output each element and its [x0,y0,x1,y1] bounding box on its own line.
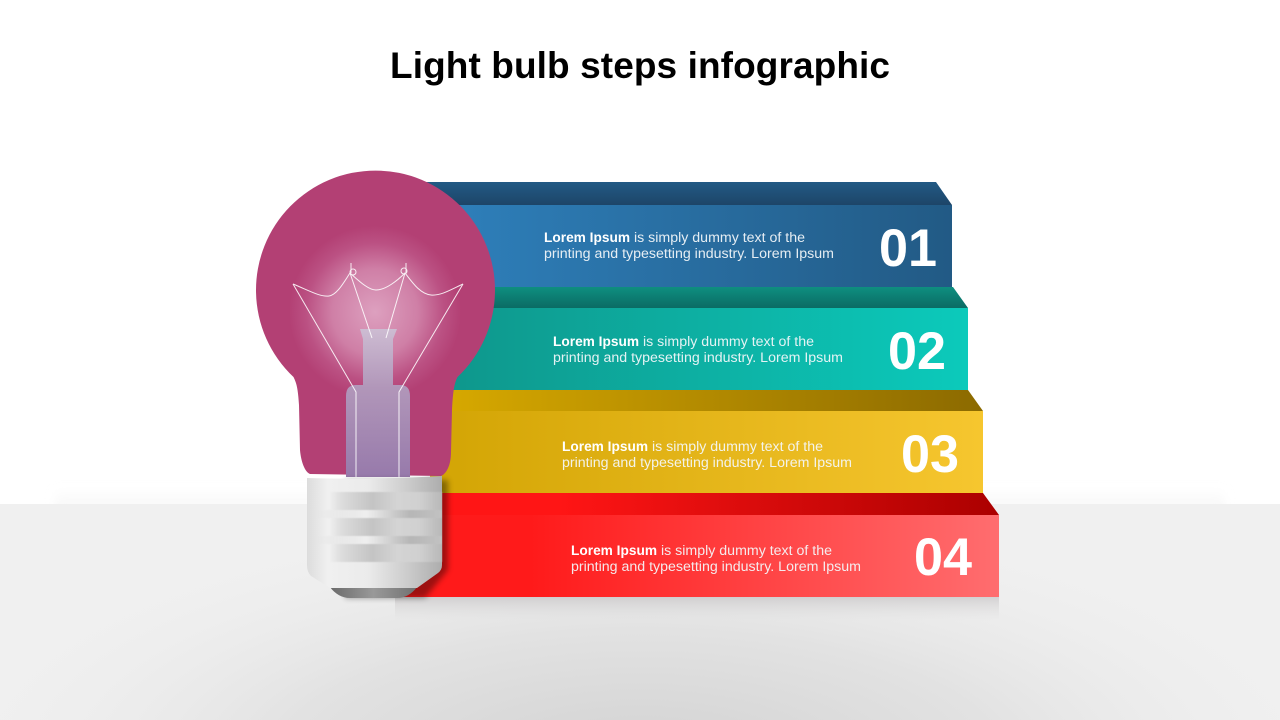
icon: light bulb [256,171,495,598]
step 03: yellow [430,390,983,493]
step 04 top face [400,493,999,515]
floor background [0,488,1280,720]
step 02 front face [440,308,968,390]
step 02 number: 02 [888,322,946,381]
step 04 number: 04 [914,528,973,587]
step 02 top face [440,287,968,308]
reflection under steps [395,597,999,621]
step 01: blue [420,182,952,287]
step 02 text: Lorem Ipsum [553,334,639,349]
glass stem [346,329,410,477]
step 02 text: printing and typesetting industry. Lorem Ipsum [553,350,843,365]
bulb glass [256,171,495,476]
step 02 text: is simply dummy text of the [643,334,814,349]
step 04 text [571,543,861,574]
step 04: red [400,493,999,597]
step 04 text: printing and typesetting industry. Lorem Ipsum [571,559,861,574]
step 03 number: 03 [901,425,959,484]
step 03 text [562,439,852,470]
step 01 text: printing and typesetting industry. Lorem Ipsum [544,246,834,261]
filament wires [293,263,463,477]
step 03 text: printing and typesetting industry. Lorem Ipsum [562,455,852,470]
step 01 text: is simply dummy text of the [634,230,805,245]
step 01 front face [440,205,952,287]
step 03 text: is simply dummy text of the [652,439,823,454]
step 03 text: Lorem Ipsum [562,439,648,454]
step 03 front face [430,411,983,493]
step 02: teal [440,287,968,390]
step 01 text: Lorem Ipsum [544,230,630,245]
step 04 text: is simply dummy text of the [661,543,832,558]
title: Light bulb steps infographic [390,45,890,86]
step 01 top face [420,182,952,205]
screw base metal [307,476,442,588]
screw base shadow [345,480,448,598]
step 01 text [544,230,834,261]
step 03 top face [430,390,983,411]
step 04 text: Lorem Ipsum [571,543,657,558]
step 04 front face [400,515,999,597]
step 02 text [553,334,843,365]
step 01 number: 01 [879,219,937,278]
screw base cap [330,587,417,598]
